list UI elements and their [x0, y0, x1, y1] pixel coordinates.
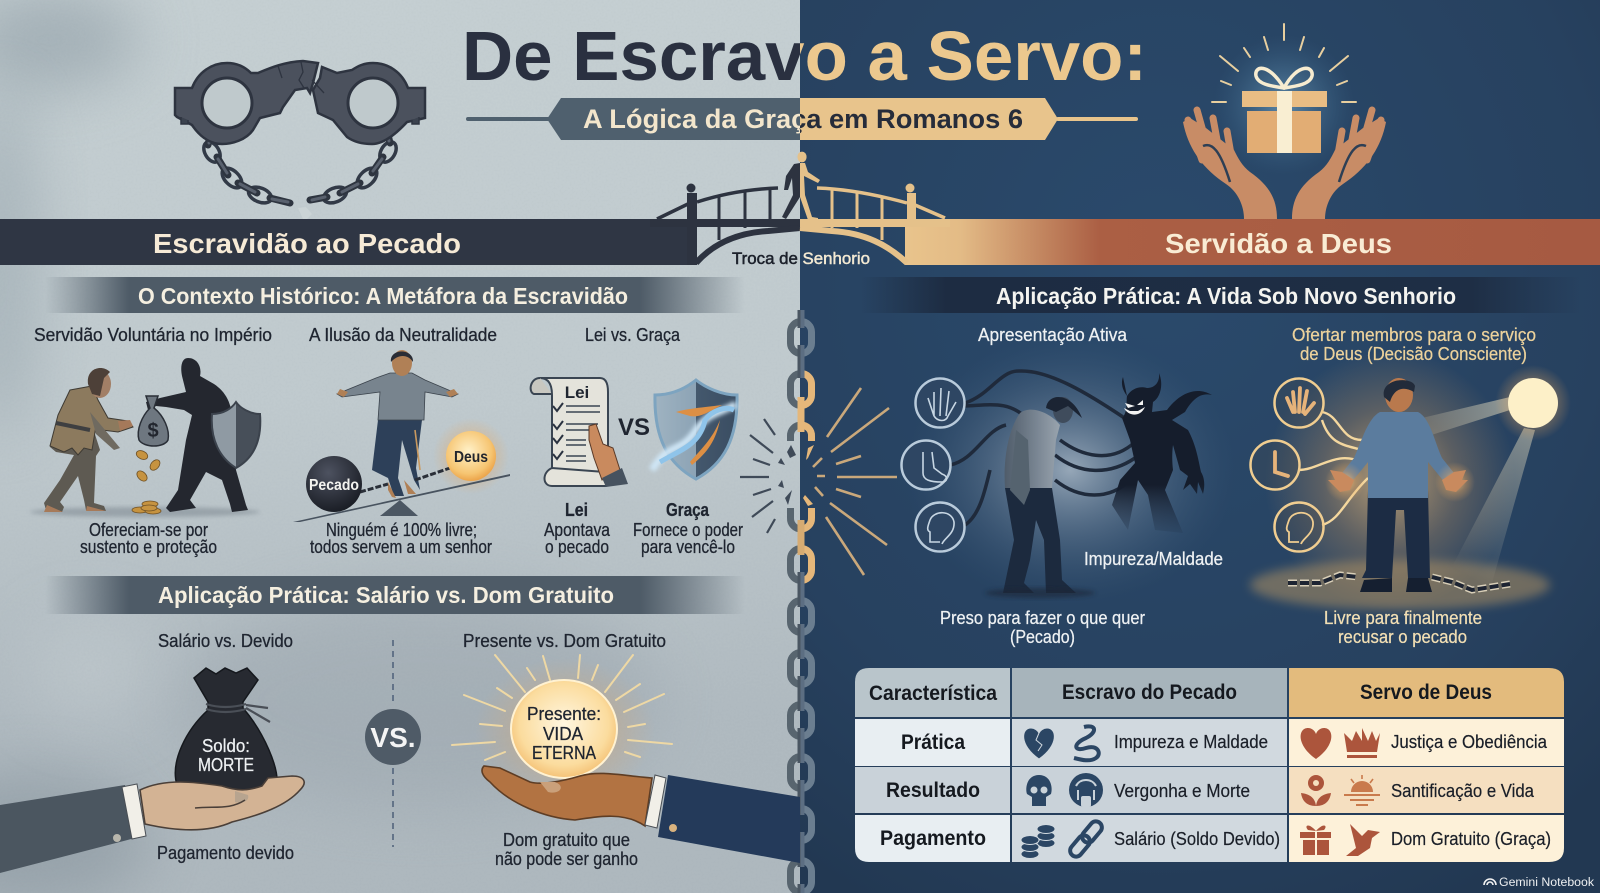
text: VIDA: VIDA [543, 724, 583, 744]
icon circles: hand, foot, head [902, 378, 964, 552]
icon: gift on open hands [1183, 24, 1386, 219]
caption: para vencê-lo: para vencê-lo [641, 537, 735, 557]
chain bars [798, 310, 804, 893]
icon: chain link [1068, 819, 1104, 859]
member glyphs [923, 388, 956, 544]
background grain [0, 0, 800, 893]
caption line 2: sustento e proteção [80, 537, 217, 557]
ground shadow [985, 588, 1095, 598]
dark tempter [1112, 373, 1212, 533]
row: Resultado: Vergonha e Morte [1114, 781, 1250, 801]
heading line 2: de Deus (Decisão Consciente) [1300, 344, 1527, 364]
illustration: balance with chain: Pecado [309, 477, 359, 494]
panel: Apresentação Ativa, enslaved figure [902, 325, 1235, 647]
caption: Lei: Lei [565, 500, 588, 520]
caption: Ofereciam-se por [89, 520, 208, 540]
icon: scroll of the law [531, 378, 628, 487]
caption line 2: (Pecado) [1010, 627, 1075, 647]
central chain with burst [740, 310, 897, 893]
banner: Escravidão ao Pecado: Escravidão ao Pecado [153, 228, 461, 259]
text: Presente: Presente: [527, 704, 601, 724]
member glyphs [1275, 388, 1314, 476]
rays, right [813, 388, 897, 575]
vs divider: VS. [370, 722, 416, 753]
icon: glowing egg with rays [452, 655, 672, 802]
icon: sleeved hand receiving [0, 776, 304, 873]
label: Impureza/Maldade: Impureza/Maldade [1084, 549, 1223, 569]
section header: Salário vs. Dom Gratuito [45, 576, 745, 614]
heading: Ofertar membros para o serviço [1292, 325, 1536, 345]
sun [1495, 365, 1571, 441]
icon: skull [1026, 775, 1052, 806]
text: MORTE: MORTE [198, 755, 254, 775]
column heading: Lei vs. Graça [585, 325, 681, 345]
row: Resultado [855, 767, 1564, 813]
illustration: warm glow [1265, 350, 1515, 610]
row: Pagamento: Pagamento [880, 827, 986, 850]
cuff left [175, 61, 318, 144]
banner: Servidão a Deus: Servidão a Deus [1165, 228, 1392, 259]
column: wage of death [0, 631, 304, 873]
caption: Dom gratuito que [503, 830, 630, 850]
illustration: balance with chain: Deus [454, 449, 488, 466]
caption line 2: não pode ser ganho [495, 849, 638, 869]
section header: Aplicação Prática, Vida Sob Novo Senhorio: Aplicação Prática: A Vida Sob Novo Senhorio [996, 283, 1456, 309]
chain links [790, 322, 812, 892]
cuff right [313, 63, 425, 144]
banner: Escravidão ao Pecado [0, 219, 696, 265]
caption: Graça: Graça [666, 500, 710, 520]
subtitle ribbon: A Lógica da Graça em Romanos 6 [583, 104, 1023, 134]
icon: sunrise [1344, 775, 1380, 806]
walker [797, 152, 807, 162]
column heading: Servidão Voluntária no Império [34, 325, 272, 345]
shield [212, 402, 260, 468]
comparison table [855, 668, 1564, 862]
watermark: Gemini Notebook: Gemini Notebook [1499, 877, 1594, 889]
icon: serpent [1074, 726, 1099, 760]
banner: Servidão a Deus [905, 219, 1600, 265]
text: ETERNA: ETERNA [532, 743, 596, 763]
panel: Ofertar membros, freed figure [1250, 325, 1571, 647]
label: Troca de Senhorio: Troca de Senhorio [732, 249, 870, 268]
bridge with walking figure [650, 152, 950, 265]
money bag [138, 396, 168, 446]
icon: coin stack [1021, 824, 1055, 858]
text: vs: VS [618, 414, 650, 441]
row: Resultado: Santificação e Vida [1391, 781, 1535, 801]
icon: gift [1300, 826, 1331, 855]
row: Prática: Justiça e Obediência [1391, 732, 1548, 752]
icon: dove [1346, 824, 1380, 856]
subtitle ribbon [466, 98, 1138, 140]
icon: sleeved hand giving [482, 766, 800, 863]
icon: flower [1301, 775, 1331, 806]
panel: left background (slavery side) [0, 0, 800, 893]
right half of bridge [800, 188, 950, 263]
caption line 2: todos servem a um senhor [310, 537, 492, 557]
icon: crown [1344, 728, 1380, 758]
chain bars [208, 122, 390, 203]
broken chains on floor [1288, 575, 1510, 590]
text: Soldo: Soldo: [202, 736, 250, 756]
row: Pagamento: Dom Gratuito (Graça) [1391, 829, 1551, 849]
illustration: floor glow [1250, 560, 1550, 610]
header row: Característica [869, 682, 997, 705]
caption line 2: recusar o pecado [1338, 627, 1467, 647]
header row: Escravo do Pecado [1062, 681, 1237, 704]
left hand [1183, 110, 1277, 219]
icon: black money bag on hand [175, 668, 277, 803]
row: Prática: Prática [901, 731, 965, 754]
column: Lei vs. Graça [531, 325, 743, 557]
row: Resultado: Resultado [886, 779, 980, 802]
column: free gift [452, 631, 800, 869]
caption: Apontava: Apontava [544, 520, 611, 540]
dark figure [146, 358, 248, 512]
column heading: Presente vs. Dom Gratuito [463, 631, 666, 651]
section header: Salário vs. Dom Gratuito: Aplicação Prática: Salário vs. Dom Gratuito [158, 582, 614, 608]
panel: right background (service side) [800, 0, 1600, 893]
freed man [1325, 378, 1475, 592]
vs divider [365, 640, 421, 847]
beggar [44, 423, 106, 512]
header row: Servo de Deus [1360, 681, 1492, 704]
bent man [1003, 397, 1082, 593]
section header: O Contexto Histórico [45, 277, 745, 313]
illustration: cords from members to tempter [950, 371, 1135, 525]
row: Prática: Impureza e Maldade [1114, 732, 1268, 752]
rays, left [740, 419, 775, 533]
caption: Ninguém é 100% livre; [326, 520, 477, 540]
column: Servidão Voluntária no Império [30, 325, 272, 557]
icon: crying face [1069, 773, 1103, 807]
column heading: A Ilusão da Neutralidade [309, 325, 497, 345]
fragments [778, 445, 796, 505]
golden cords [1298, 412, 1368, 525]
caption: Livre para finalmente [1324, 608, 1482, 628]
sun beams [1422, 397, 1535, 590]
column heading: Salário vs. Devido [158, 631, 293, 651]
caption: o pecado: o pecado [545, 537, 609, 557]
row: Pagamento: Salário (Soldo Devido) [1114, 829, 1280, 849]
caption: Pagamento devido [157, 843, 294, 863]
caption: Preso para fazer o que quer [940, 608, 1145, 628]
illustration: beggar and armed patron [30, 358, 260, 517]
right hand [1292, 110, 1386, 219]
illustration: balance with chain [293, 350, 510, 522]
column: A Ilusão da Neutralidade [293, 325, 510, 557]
icon: broken handcuffs and chain [175, 61, 425, 226]
icon: broken heart [1024, 728, 1054, 759]
coins [132, 449, 162, 514]
caption: Fornece o poder: Fornece o poder [633, 520, 743, 540]
title: De Escravo a Servo: [462, 17, 1147, 95]
header row [855, 668, 1564, 717]
icon circles: hand, foot, head [1250, 378, 1324, 552]
section header: O Contexto Histórico: O Contexto Histórico: A Metáfora da Escravidão [138, 283, 628, 309]
illustration: glow behind figures [905, 335, 1235, 605]
icon: scroll of the law: Lei [565, 383, 589, 402]
heading: Apresentação Ativa [978, 325, 1128, 345]
section header: Aplicação Prática, Vida Sob Novo Senhorio [860, 277, 1580, 313]
icon: shield with flame of grace [652, 380, 737, 479]
illustration: beggar and armed patron: $ [147, 420, 159, 442]
left half of bridge [650, 188, 800, 263]
icon: heart [1301, 728, 1331, 759]
row: Pagamento [855, 815, 1564, 862]
row: Prática [855, 719, 1564, 766]
chain links left [200, 139, 400, 206]
